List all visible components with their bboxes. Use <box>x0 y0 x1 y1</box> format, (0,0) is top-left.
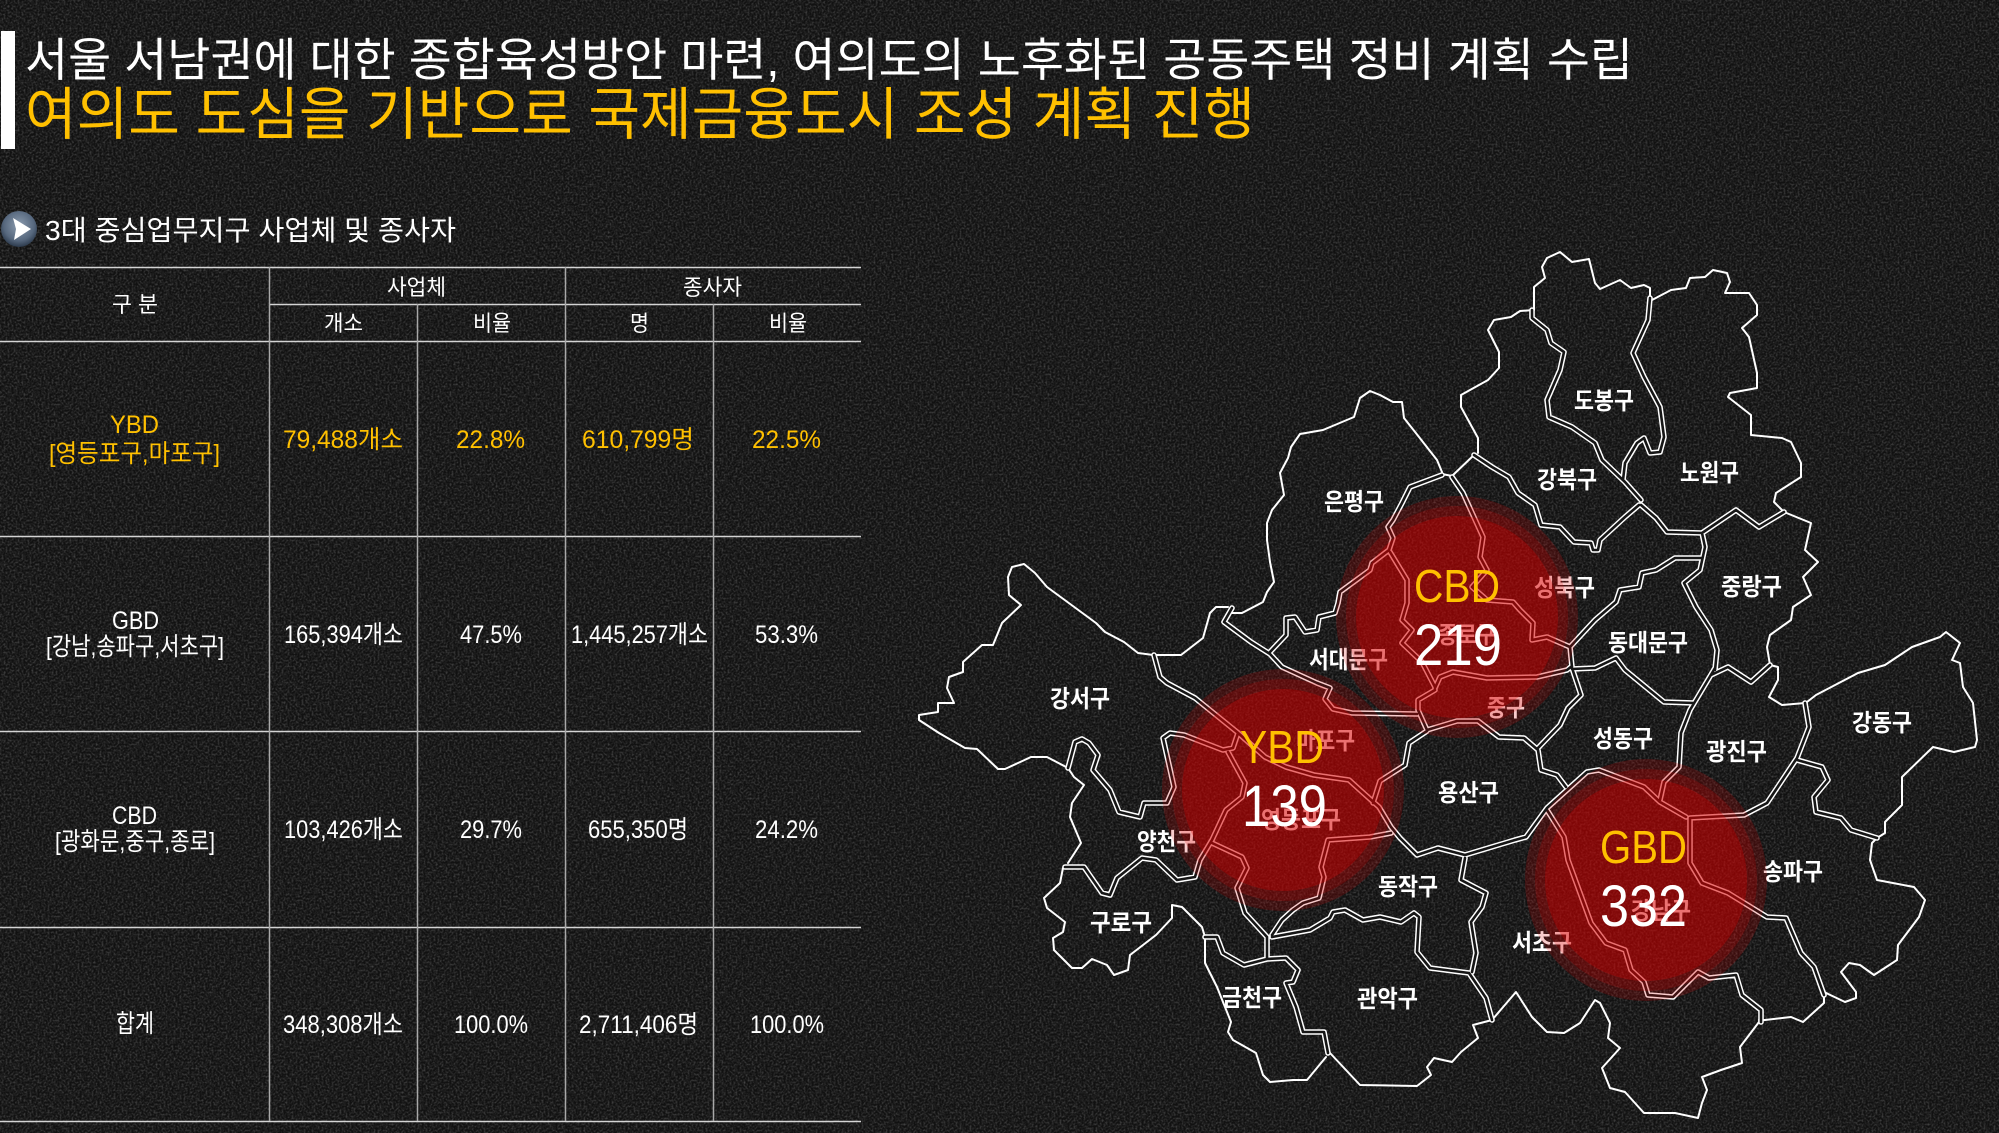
district labels: 구로구 <box>1090 910 1152 937</box>
district labels: 중구 <box>1487 695 1525 722</box>
district labels: 강북구 <box>1537 467 1597 494</box>
table row: YBD: [영등포구,마포구] <box>49 440 220 468</box>
GBD bubble: GBD <box>1600 821 1687 873</box>
table row: GBD: 1,445,257개소 <box>571 621 708 649</box>
CBD bubble: CBD <box>1414 560 1500 612</box>
icon: play bullet <box>1 211 37 247</box>
district labels: 관악구 <box>1357 986 1418 1013</box>
table row: CBD: 655,350명 <box>588 816 688 844</box>
table row: GBD: GBD <box>112 607 159 635</box>
table row: total: 348,308개소 <box>283 1011 403 1039</box>
district labels: 강서구 <box>1050 686 1110 713</box>
district labels: 강동구 <box>1852 710 1912 737</box>
table header <box>112 275 807 336</box>
district labels: 양천구 <box>1137 829 1196 856</box>
district labels: 중랑구 <box>1721 574 1782 601</box>
table row: total: 100.0% <box>750 1011 824 1039</box>
title line 1: 서울 서남권에 대한 종합육성방안 마련, 여의도의 노후화된 공동주택 정비 계획 수립 <box>25 34 1633 86</box>
table grid <box>0 267 861 1122</box>
YBD bubble: YBD <box>1240 721 1324 773</box>
district labels: 강남구 <box>1631 898 1691 925</box>
table row: YBD: 22.5% <box>752 426 821 454</box>
table row: YBD: 22.8% <box>456 426 525 454</box>
table row: total: 2,711,406명 <box>579 1011 698 1039</box>
map district boundary gap <box>1065 298 1877 1053</box>
district labels: 노원구 <box>1680 460 1739 487</box>
table header: 비율 <box>769 311 807 336</box>
table row: CBD: CBD <box>112 802 157 830</box>
table row: CBD <box>55 802 818 856</box>
district labels: 동대문구 <box>1608 630 1688 657</box>
district labels: 광진구 <box>1706 739 1767 766</box>
table row: YBD: YBD <box>110 411 159 439</box>
table row: total <box>116 1010 824 1039</box>
seoul district map <box>919 252 1977 1118</box>
table row: GBD: [강남,송파구,서초구] <box>46 633 224 661</box>
map district boundaries <box>1065 298 1877 1053</box>
district labels: 서대문구 <box>1309 647 1388 674</box>
district labels: 마포구 <box>1296 728 1355 755</box>
title line 2: 여의도 도심을 기반으로 국제금융도시 조성 계획 진행 <box>25 83 1255 147</box>
district labels: 성동구 <box>1593 726 1653 753</box>
table header: 개소 <box>324 311 363 336</box>
YBD bubble <box>1162 669 1404 911</box>
table row: GBD: 53.3% <box>755 621 818 649</box>
district labels: 동작구 <box>1378 874 1438 901</box>
table row: YBD: 79,488개소 <box>283 426 403 454</box>
GBD bubble: 332 <box>1600 874 1687 939</box>
table row: total: 100.0% <box>454 1011 528 1039</box>
CBD bubble: 219 <box>1414 613 1502 678</box>
table row: GBD: 47.5% <box>460 621 522 649</box>
title <box>25 34 1633 147</box>
table header: 명 <box>630 311 649 336</box>
district labels: 종로구 <box>1438 622 1496 649</box>
table header: 사업체 <box>387 275 446 300</box>
table row: GBD: 165,394개소 <box>284 621 403 649</box>
table row: YBD: 610,799명 <box>582 426 694 454</box>
table row: total: 합계 <box>116 1010 154 1038</box>
CBD bubble <box>1336 496 1578 738</box>
district labels: 용산구 <box>1438 780 1499 807</box>
table row: GBD <box>46 607 818 661</box>
table header: 구 분 <box>112 292 158 317</box>
district labels <box>1050 388 1912 1013</box>
table row: CBD: 29.7% <box>460 816 522 844</box>
district labels: 송파구 <box>1763 859 1823 886</box>
table row: YBD <box>49 411 821 468</box>
section heading <box>1 211 456 247</box>
district labels: 성북구 <box>1534 575 1595 602</box>
YBD bubble: 139 <box>1242 774 1327 839</box>
table row: CBD: 103,426개소 <box>284 816 403 844</box>
GBD bubble <box>1525 759 1767 1001</box>
district labels: 금천구 <box>1222 985 1282 1012</box>
district labels: 서초구 <box>1512 930 1572 957</box>
table header: 종사자 <box>683 275 742 300</box>
table header: 비율 <box>473 311 511 336</box>
district labels: 은평구 <box>1324 489 1384 516</box>
title accent bar <box>1 31 15 149</box>
section heading text: 3대 중심업무지구 사업체 및 종사자 <box>45 215 456 246</box>
map outer boundary <box>919 252 1977 1118</box>
district labels: 영등포구 <box>1261 807 1341 834</box>
table: business and workers by district <box>0 267 861 1122</box>
table row: CBD: 24.2% <box>755 816 818 844</box>
table row: CBD: [광화문,중구,종로] <box>55 828 215 856</box>
district labels: 도봉구 <box>1574 388 1634 415</box>
